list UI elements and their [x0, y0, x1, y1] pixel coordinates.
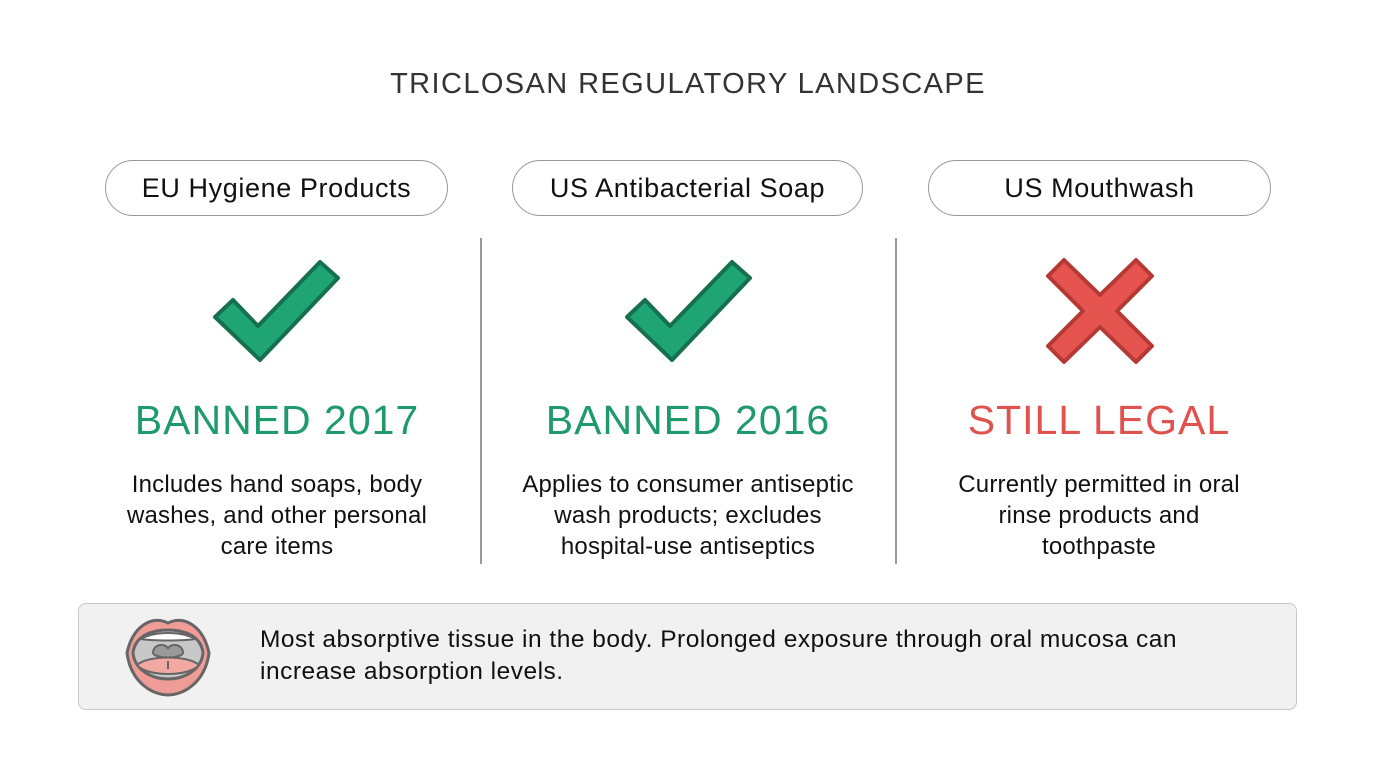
description 1: care items — [221, 533, 333, 560]
pill: US Mouthwash: US Mouthwash — [1004, 173, 1195, 203]
description 2 — [522, 471, 854, 560]
description 1: washes, and other personal — [127, 502, 427, 529]
callout text: Most absorptive tissue in the body. Prolonged exposure through oral mucosa can — [260, 626, 1177, 653]
callout text — [260, 626, 1177, 685]
description 3: rinse products and — [998, 502, 1200, 529]
callout box — [78, 603, 1297, 710]
description 3: toothpaste — [1042, 533, 1156, 560]
pill: US Antibacterial Soap — [512, 160, 863, 216]
icon: green check 2 — [624, 260, 752, 362]
description 1: Includes hand soaps, body — [132, 471, 422, 498]
icon: mouth — [126, 618, 210, 696]
callout text: increase absorption levels. — [260, 658, 564, 685]
status: STILL LEGAL: STILL LEGAL — [968, 397, 1230, 443]
description 1 — [127, 471, 427, 560]
description 3: Currently permitted in oral — [958, 471, 1240, 498]
status: BANNED 2016: BANNED 2016 — [546, 397, 830, 443]
description 3 — [958, 471, 1240, 560]
pill: EU Hygiene Products — [105, 160, 448, 216]
description 2: wash products; excludes — [554, 502, 822, 529]
title: TRICLOSAN REGULATORY LANDSCAPE — [390, 68, 986, 100]
pill: US Mouthwash — [928, 160, 1271, 216]
icon: red X — [1046, 258, 1154, 364]
icon: green check 1 — [212, 260, 340, 362]
pill: EU Hygiene Products: EU Hygiene Products — [142, 173, 411, 203]
description 2: Applies to consumer antiseptic — [522, 471, 854, 498]
status: BANNED 2017: BANNED 2017 — [135, 397, 419, 443]
description 2: hospital-use antiseptics — [561, 533, 815, 560]
pill: US Antibacterial Soap: US Antibacterial Soap — [550, 173, 825, 203]
